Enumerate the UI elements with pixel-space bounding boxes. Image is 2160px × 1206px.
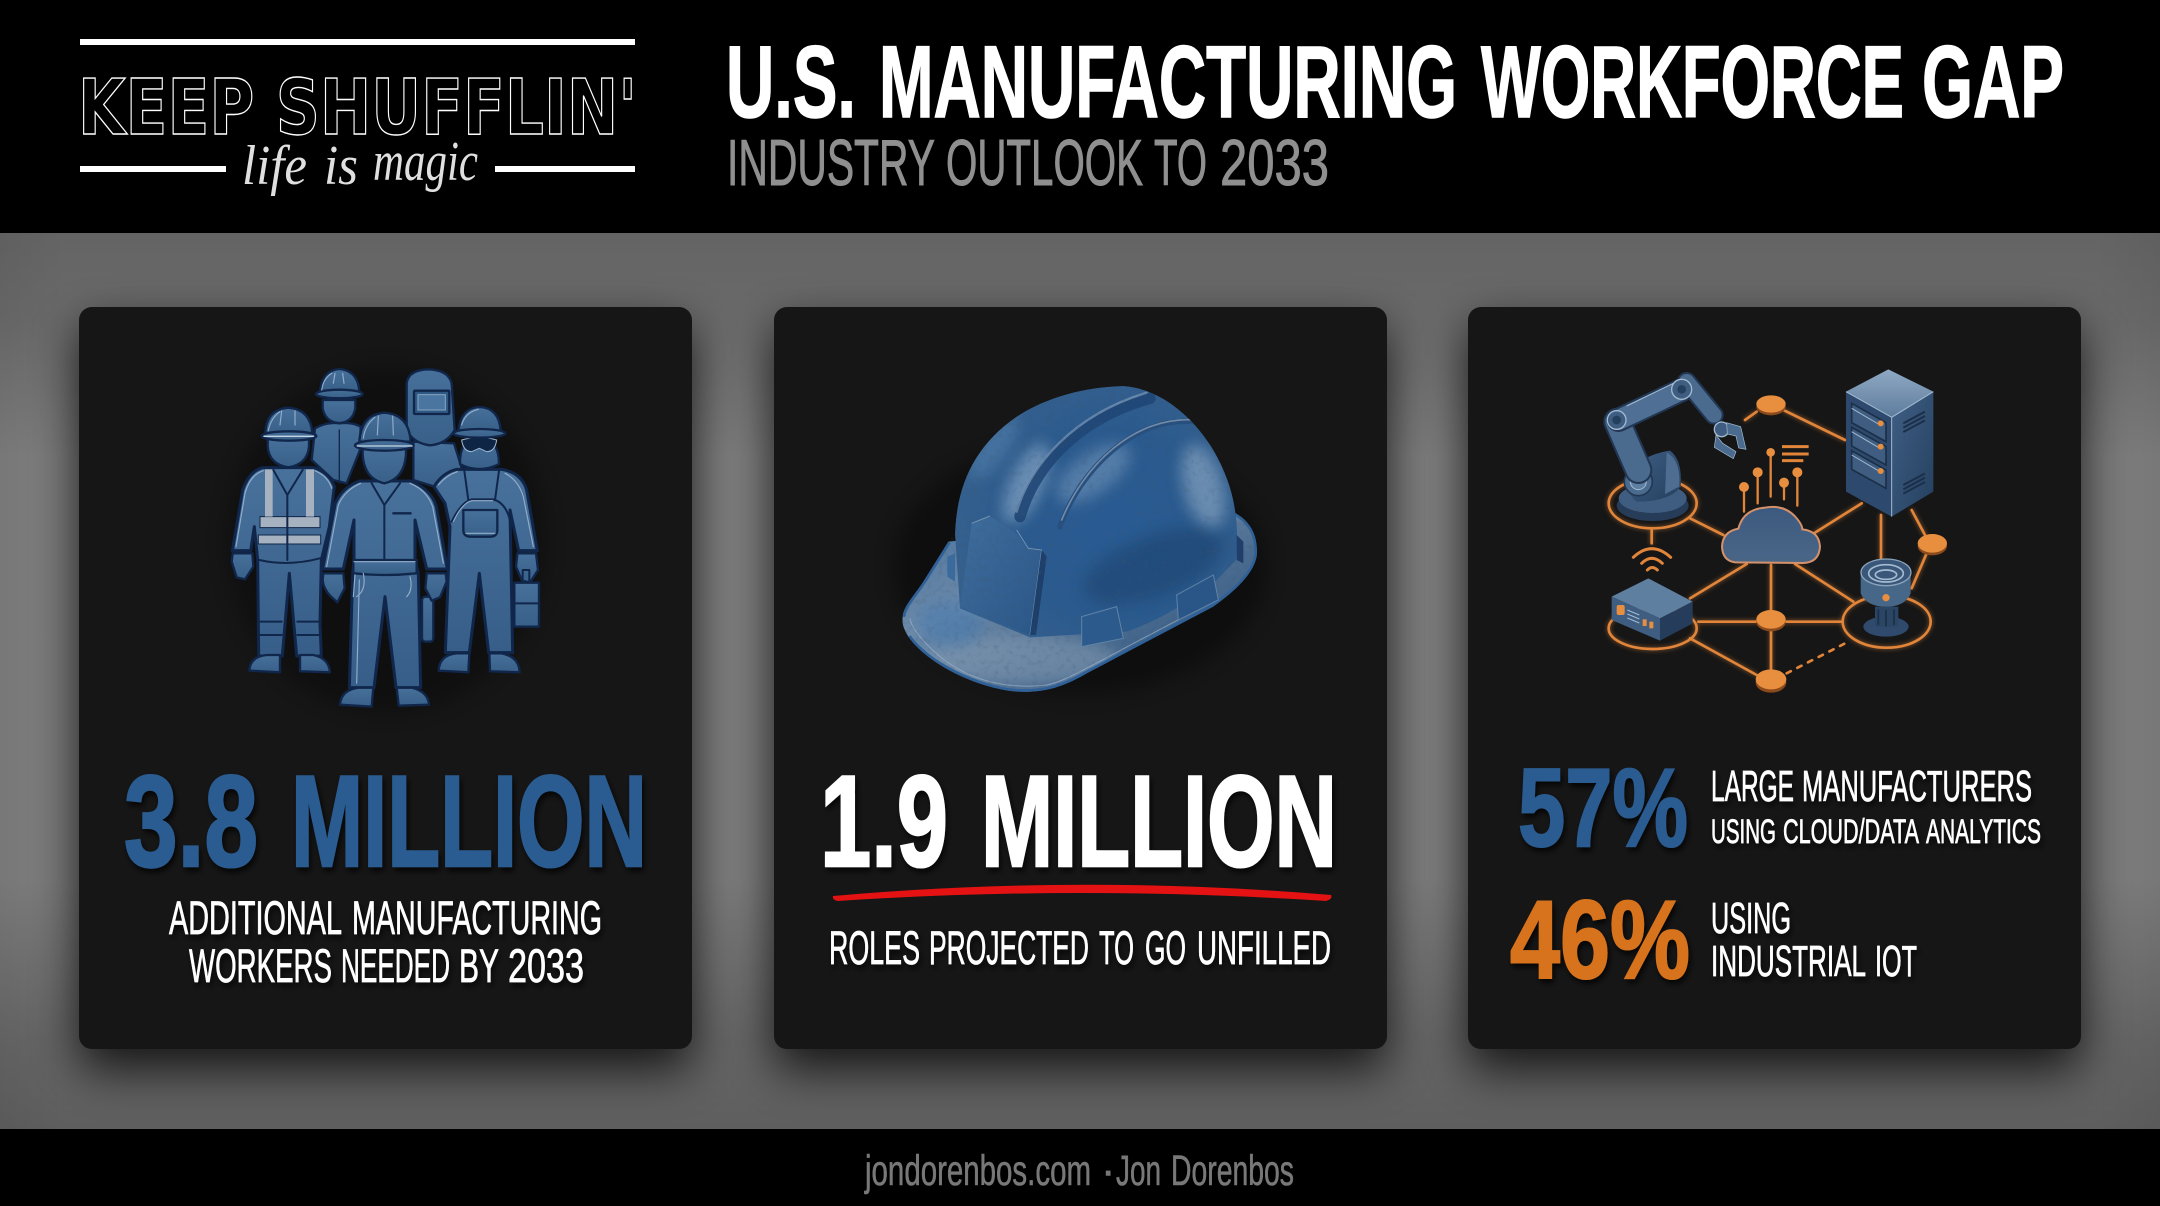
icon: group of workers [227, 367, 547, 713]
sensor [1861, 559, 1911, 637]
label: using cloud/data analytics [1711, 813, 2041, 851]
left worker with hi-vis vest [232, 468, 334, 656]
label: large manufacturers: LARGE [1711, 763, 1794, 811]
caption line 2 [189, 940, 584, 993]
stat: 1.9 million [820, 748, 1337, 894]
server rack [1846, 369, 1933, 517]
caption line 1: MANUFACTURING [352, 892, 602, 945]
ridges [1020, 398, 1150, 517]
label: using: USING [1711, 895, 1791, 943]
caption: UNFILLED [1197, 922, 1331, 975]
right worker in overalls [434, 469, 537, 653]
stat: 3.8 million [124, 748, 647, 894]
logo: Keep Shufflin': KEEP SHUFFLIN' [78, 64, 637, 153]
title: GAP [1922, 25, 2064, 139]
gateway box [1612, 578, 1693, 641]
footer credit: jondorenbos.com [864, 1147, 1091, 1195]
title [726, 25, 2064, 139]
brim tabs [1082, 607, 1123, 647]
stat: 3.8 million: 3.8 [124, 748, 258, 894]
footer band [0, 1129, 2160, 1206]
footer credit: · [1101, 1147, 1115, 1195]
label: industrial iot: INDUSTRIAL [1711, 938, 1866, 986]
subtitle: 2033 [1220, 126, 1329, 199]
data signal pins [1739, 447, 1809, 512]
caption line 1: ADDITIONAL [169, 892, 342, 945]
subtitle: OUTLOOK [946, 126, 1143, 199]
wifi symbol [1633, 549, 1671, 570]
caption line 2: WORKERS [189, 940, 332, 993]
header band [0, 0, 2160, 233]
network lines [1609, 410, 1931, 675]
stat: 57%: 57% [1518, 746, 1688, 870]
dome [955, 386, 1237, 637]
caption: GO [1145, 922, 1186, 975]
label: industrial iot: IOT [1875, 938, 1917, 986]
caption line 1 [169, 892, 602, 945]
stat: 46%: 46% [1510, 878, 1690, 1002]
subtitle: TO [1154, 126, 1207, 199]
back-left worker [312, 423, 361, 483]
grain [902, 400, 1247, 686]
stat: 1.9 million: 1.9 [820, 748, 948, 894]
panel: additional workers [79, 307, 692, 1049]
label: using cloud/data analytics: CLOUD/DATA [1783, 813, 1919, 851]
footer credit: Dorenbos [1171, 1147, 1294, 1195]
icon: blue hard hat [893, 380, 1267, 700]
caption [829, 922, 1331, 975]
subtitle [727, 126, 1329, 199]
caption line 2: BY [459, 940, 499, 993]
front plate [964, 516, 1036, 580]
caption line 2: NEEDED [341, 940, 450, 993]
footer credit: Jon [1116, 1147, 1161, 1195]
logo: Keep Shufflin': magic [373, 131, 478, 193]
panel: unfilled roles [774, 307, 1387, 1049]
panel: technology adoption [1468, 307, 2081, 1049]
logo: Keep Shufflin' [78, 39, 637, 197]
title: WORKFORCE [1481, 25, 1904, 139]
nodes [1756, 395, 1947, 693]
robot arm [1607, 379, 1746, 521]
stat: 3.8 million: MILLION [291, 748, 647, 894]
label: large manufacturers [1711, 763, 2032, 811]
logo: Keep Shufflin': is [324, 135, 358, 197]
red underline [833, 885, 1331, 901]
cloud [1722, 507, 1820, 563]
caption: PROJECTED [929, 922, 1089, 975]
stat: 1.9 million: MILLION [981, 748, 1337, 894]
title: U.S. [726, 25, 856, 139]
caption line 2: 2033 [508, 940, 584, 993]
tool in hand [422, 597, 433, 642]
background: grey stage [0, 233, 2160, 1129]
caption: ROLES [829, 922, 920, 975]
subtitle: INDUSTRY [727, 126, 935, 199]
label: using cloud/data analytics: USING [1711, 813, 1776, 851]
label: using cloud/data analytics: ANALYTICS [1926, 813, 2041, 851]
caption: TO [1099, 922, 1134, 975]
brim [902, 513, 1257, 692]
front worker [323, 481, 447, 688]
title: MANUFACTURING [879, 25, 1457, 139]
logo: Keep Shufflin': life [242, 135, 307, 197]
welder with hood [413, 442, 463, 488]
icon: connected factory network [1607, 369, 1947, 693]
